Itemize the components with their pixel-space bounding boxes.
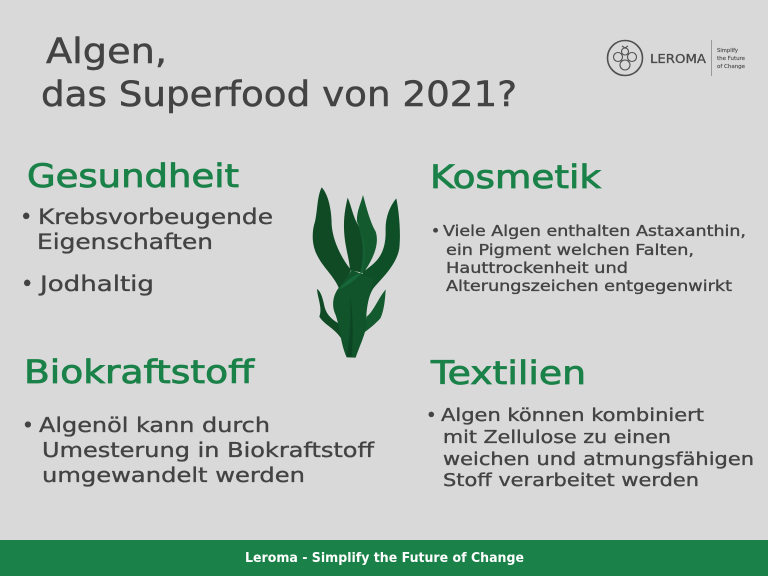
text block: Textilien list: Algen können kombiniert [441,405,704,426]
text block: Gesundheit list [20,205,273,296]
icon: seaweed [313,187,400,358]
text block: Kosmetik list: Viele Algen enthalten Astaxanthin, [443,222,746,240]
text block: Textilien list: Stoff verarbeitet werden [443,470,699,491]
text block: Biokraftstoff list: • [22,413,34,437]
text block: Gesundheit list: • [20,205,32,229]
text block: Textilien list [426,405,754,491]
title: das Superfood von 2021? [41,75,517,115]
logo: Leroma: the Future [717,56,746,62]
text block: Textilien list: weichen und atmungsfähigen [443,449,754,470]
text block: Kosmetik list: • [431,222,440,240]
logo: Leroma: LEROMA [650,51,706,66]
heading: Kosmetik: Kosmetik [430,158,602,196]
text block: Biokraftstoff list [22,413,375,487]
text block: Biokraftstoff list: Umesterung in Biokraftstoff [42,438,375,462]
text block: Kosmetik list: Hauttrockenheit und [446,259,628,277]
logo: Leroma: of Change [717,64,746,70]
text block: Kosmetik list [431,222,746,295]
text block: Biokraftstoff list: umgewandelt werden [42,463,305,487]
heading: Gesundheit: Gesundheit [27,157,239,195]
text block: Gesundheit list: • [21,272,33,296]
heading: Biokraftstoff: Biokraftstoff [24,353,255,391]
text block: Biokraftstoff list: Algenöl kann durch [39,413,270,437]
text block: Textilien list: • [426,405,437,426]
text block: Kosmetik list: Alterungszeichen entgegenwirkt [446,277,732,295]
text block: Textilien list: mit Zellulose zu einen [443,427,671,448]
title [41,32,517,115]
footer banner [0,540,768,576]
text block: Kosmetik list: ein Pigment welchen Falten, [446,241,694,259]
text block: Gesundheit list: Krebsvorbeugende [38,205,273,229]
logo: Leroma [608,40,746,76]
heading: Textilien: Textilien [430,354,586,392]
title: Algen, [46,32,167,72]
logo: Leroma: Simplify [717,48,739,54]
text block: Gesundheit list: Jodhaltig [38,272,154,296]
text block: Gesundheit list: Eigenschaften [37,230,213,254]
footer banner: Leroma - Simplify the Future of Change [245,550,524,566]
